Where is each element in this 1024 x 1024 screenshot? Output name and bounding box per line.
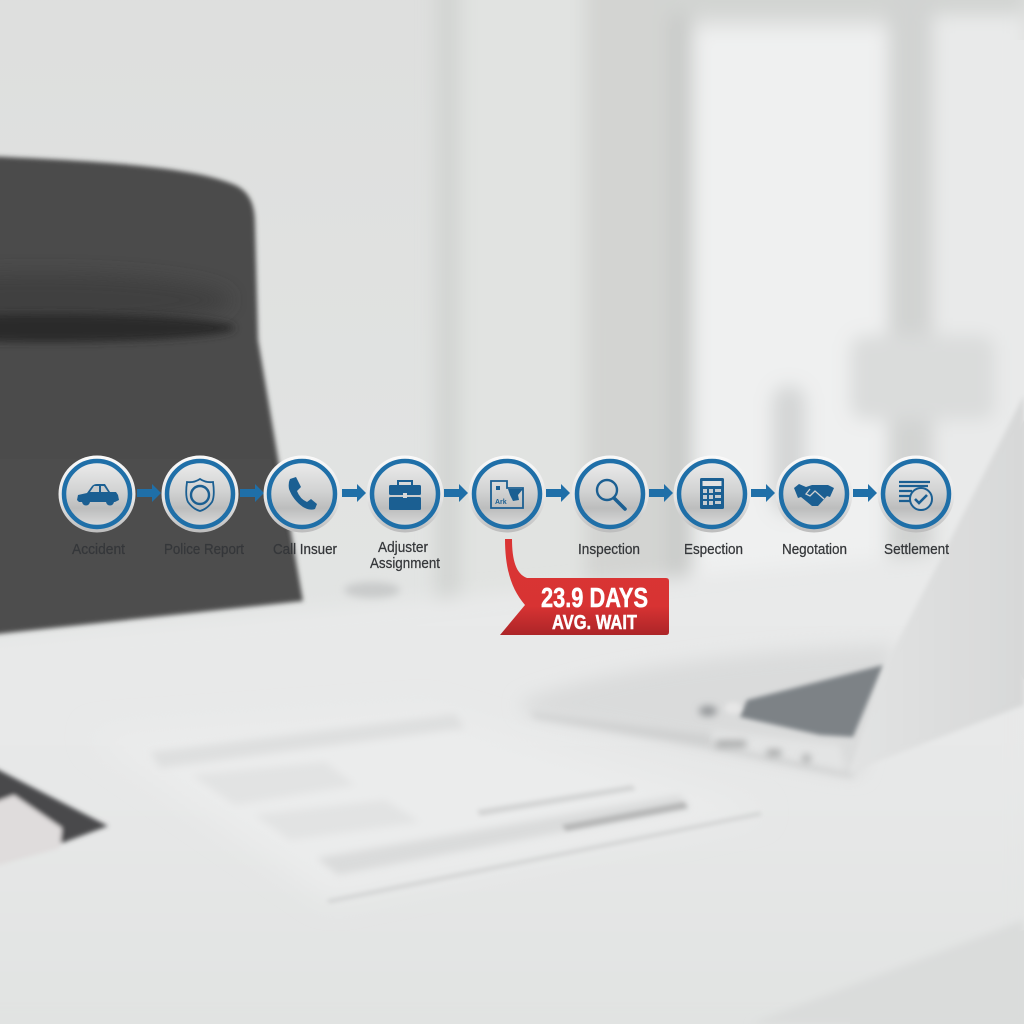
label: Adjuster Assignment: Assignment (370, 555, 441, 572)
callout ribbon (500, 539, 669, 635)
background: mouse pad and device (0, 750, 108, 876)
step 1: accident (58, 456, 136, 558)
step 9: settlement (878, 456, 954, 558)
step 5: map document (468, 456, 546, 532)
step 3: call insurer (264, 456, 340, 558)
icon: calculator in circle (674, 456, 750, 532)
label: Accident: Accident (72, 541, 126, 558)
background: laptop (520, 395, 1024, 778)
callout: 23.9 days average wait (500, 539, 669, 635)
arrow 6 (649, 484, 673, 502)
label: Call Insuer: Call Insuer (273, 541, 337, 558)
background: office chair (0, 155, 303, 638)
icon: handshake in circle (776, 456, 852, 532)
step 4: adjuster assignment (366, 456, 444, 572)
callout caption: AVG. WAIT (552, 612, 637, 634)
arrow 1 (137, 484, 161, 502)
label: Inspection: Inspection (578, 541, 640, 558)
icon: briefcase in circle (366, 456, 444, 532)
arrow 4 (444, 484, 468, 502)
icon: car in circle (58, 456, 136, 532)
process timeline (58, 456, 954, 572)
step 8: negotiation (776, 456, 852, 558)
callout value: 23.9 DAYS (541, 582, 648, 613)
arrow 7 (751, 484, 775, 502)
icon: map in circle: Ark (495, 499, 507, 506)
step 6: inspection (572, 456, 648, 558)
arrow 2 (240, 484, 264, 502)
arrow 3 (342, 484, 366, 502)
icon: checklist with check mark in circle (878, 456, 954, 532)
step 7: espection (674, 456, 750, 558)
background: document on desk (90, 712, 765, 903)
step 2: police report (162, 456, 245, 558)
background: blurred office wall and windows (0, 0, 1024, 700)
label: Espection: Espection (684, 541, 743, 558)
arrow 8 (853, 484, 877, 502)
icon: magnifier in circle (572, 456, 648, 532)
background: desk surface (0, 540, 1024, 1024)
label: Adjuster Assignment (370, 539, 441, 572)
icon: phone in circle (264, 456, 340, 532)
label: Settlement: Settlement (884, 541, 950, 558)
label: Negotation: Negotation (782, 541, 847, 558)
label: Police Report: Police Report (164, 541, 245, 558)
icon: police badge in circle (162, 456, 238, 532)
arrow 5 (546, 484, 570, 502)
label: Adjuster Assignment: Adjuster (378, 539, 428, 556)
